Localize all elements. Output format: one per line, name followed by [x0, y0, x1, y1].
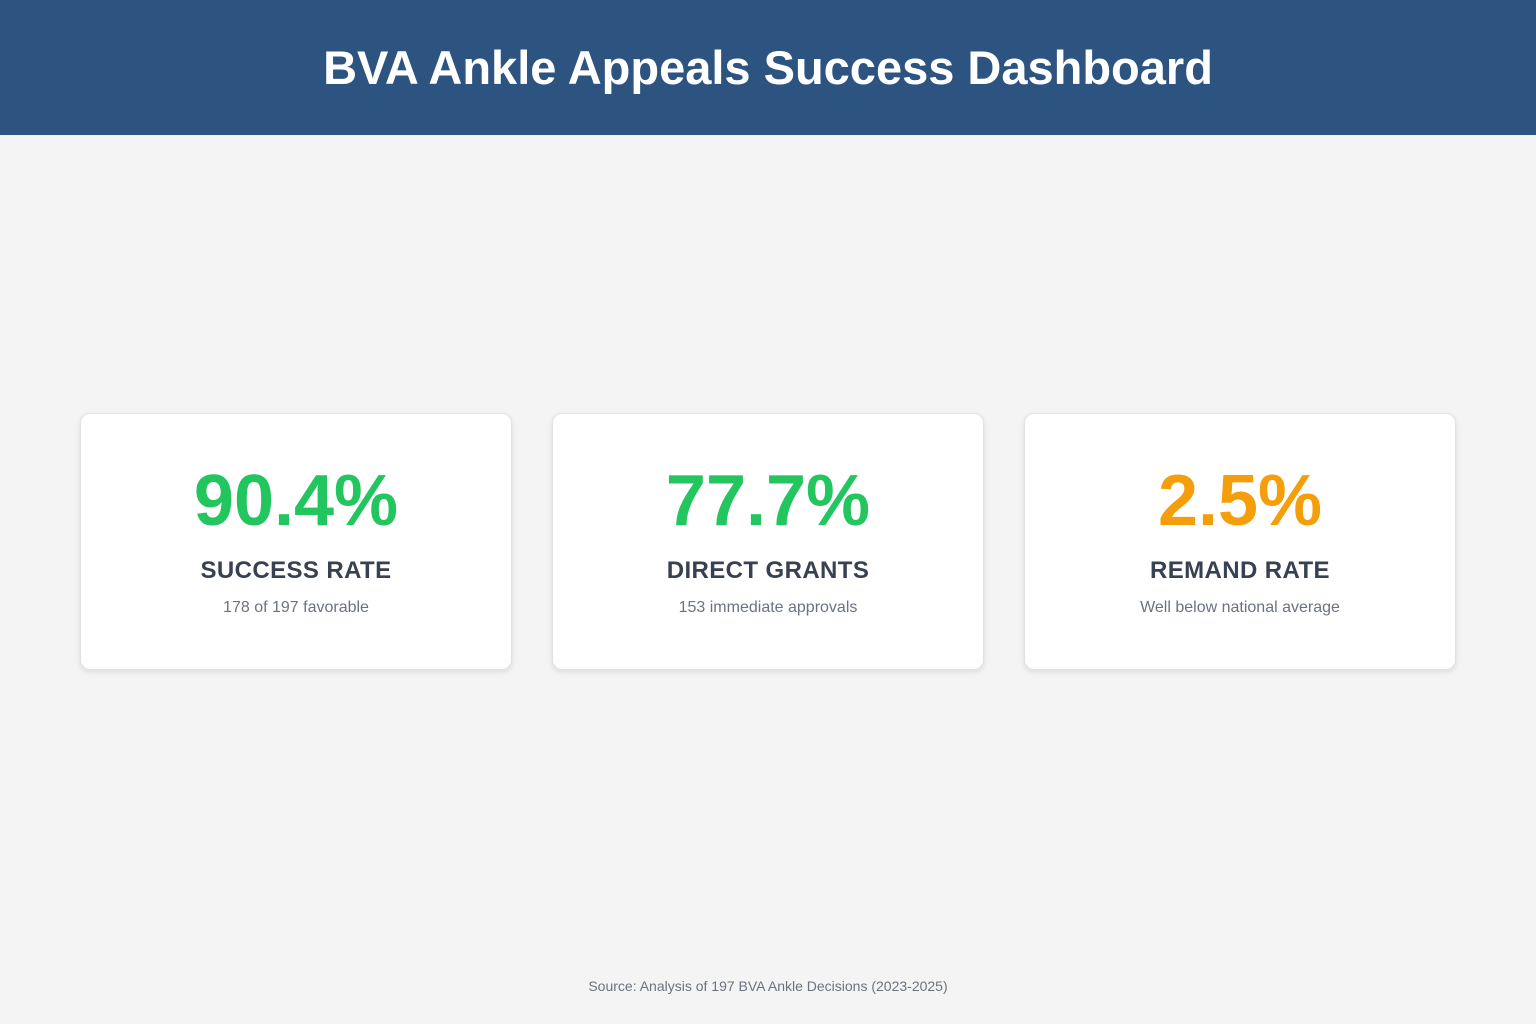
- card: direct grants: DIRECT GRANTS: [667, 557, 869, 584]
- card: success rate: 178 of 197 favorable: [223, 599, 369, 616]
- header: [0, 0, 1536, 135]
- card: remand rate: REMAND RATE: [1150, 557, 1330, 584]
- card: success rate: [80, 413, 512, 670]
- card: direct grants: [552, 413, 984, 670]
- card: remand rate: [1024, 413, 1456, 670]
- card: direct grants: 77.7%: [666, 461, 870, 541]
- header: BVA Ankle Appeals Success Dashboard: [323, 41, 1213, 94]
- card: direct grants: 153 immediate approvals: [679, 599, 857, 616]
- card: remand rate: 2.5%: [1158, 461, 1322, 541]
- card: success rate: 90.4%: [194, 461, 398, 541]
- source footer: Source: Analysis of 197 BVA Ankle Decisions (2023-2025): [588, 978, 948, 994]
- card: remand rate: Well below national average: [1140, 599, 1340, 616]
- card: success rate: SUCCESS RATE: [200, 557, 392, 584]
